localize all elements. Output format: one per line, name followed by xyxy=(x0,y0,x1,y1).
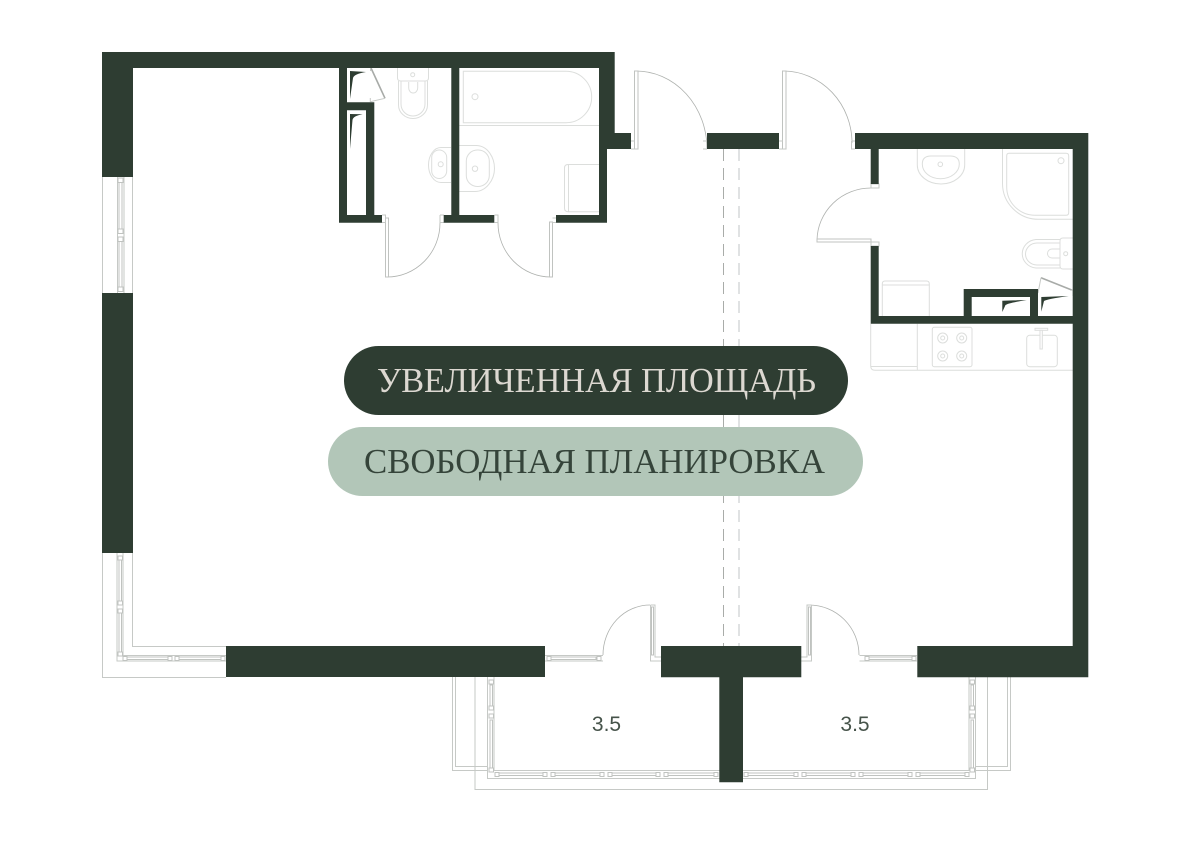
walls xyxy=(102,52,1088,782)
pill: increased area xyxy=(344,346,848,415)
pill: free layout xyxy=(328,427,863,496)
shaft door: left bathroom xyxy=(370,68,385,102)
partition dashed lines xyxy=(724,149,739,646)
window: left lower corner xyxy=(102,553,226,678)
fixture: washing machine left xyxy=(564,164,599,212)
hob xyxy=(932,327,972,367)
window and door: balcony right xyxy=(801,605,917,661)
fixture: toilet left bathroom xyxy=(398,68,428,118)
kitchen counter xyxy=(871,324,1073,370)
balcony area right: 3.5 xyxy=(840,713,870,736)
shaft marks xyxy=(350,71,1069,312)
fixture: sink right bathroom xyxy=(459,146,494,192)
fixture: bathtub xyxy=(459,71,599,126)
balcony glazing xyxy=(452,677,1010,790)
window: left upper xyxy=(102,177,132,293)
fixture: sink left bathroom xyxy=(428,148,451,182)
fixture: washing machine right xyxy=(882,281,929,316)
door: bathroom left xyxy=(382,215,444,277)
door: kitchen bathroom xyxy=(817,184,879,246)
door: entrance right xyxy=(779,71,855,149)
fixture: kitchen bathroom sink xyxy=(917,149,965,184)
balcony area left: 3.5 xyxy=(592,713,621,736)
window and door: balcony left xyxy=(545,605,661,661)
pill: increased area: УВЕЛИЧЕННАЯ ПЛОЩАДЬ xyxy=(377,361,816,400)
kitchen sink xyxy=(1027,328,1057,367)
fixture: toilet right bathroom xyxy=(1022,238,1073,269)
pill: free layout: СВОБОДНАЯ ПЛАНИРОВКА xyxy=(364,442,826,481)
door: entrance left xyxy=(631,71,707,149)
shaft door: right bathroom xyxy=(1038,278,1073,296)
fixture: shower tray xyxy=(1002,149,1073,219)
door: bathroom right xyxy=(494,215,556,277)
